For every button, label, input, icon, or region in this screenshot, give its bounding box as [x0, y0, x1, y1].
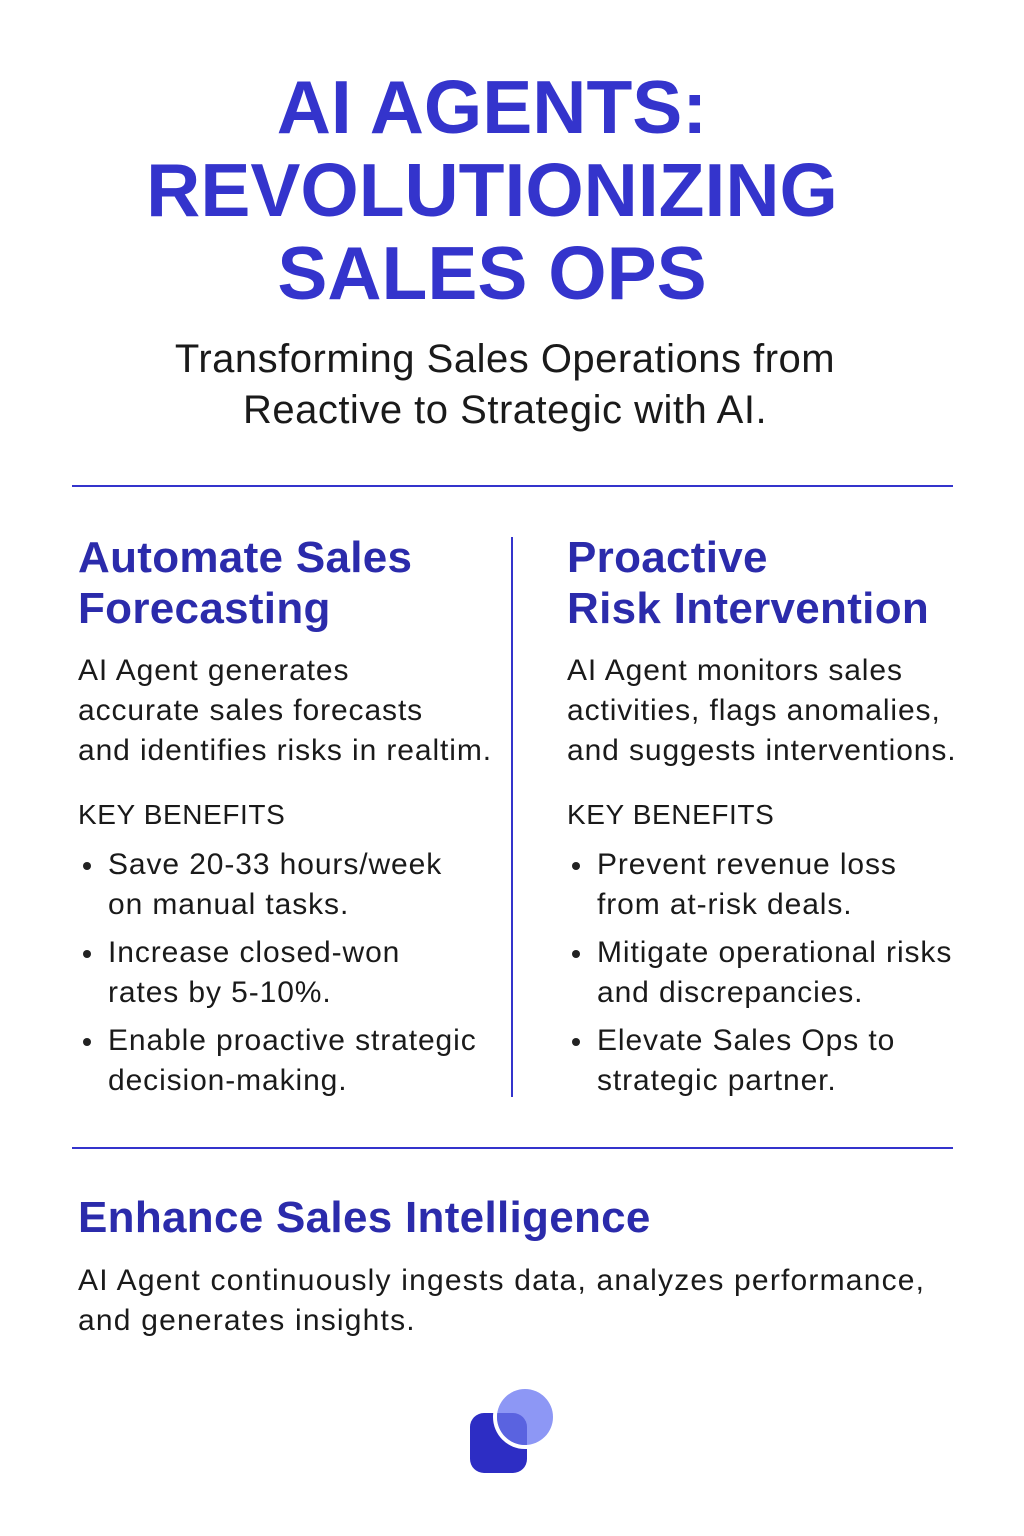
subtitle: Transforming Sales Operations from — [175, 337, 835, 381]
subtitle — [175, 337, 835, 432]
heading: Enhance Sales Intelligence — [78, 1193, 651, 1242]
description — [78, 1264, 925, 1337]
description: and suggests interventions. — [567, 734, 957, 767]
benefits list: and discrepancies. — [597, 976, 863, 1009]
benefits list: Elevate Sales Ops to — [597, 1024, 895, 1057]
benefits list: Prevent revenue loss — [597, 848, 897, 881]
benefits list: Mitigate operational risks — [597, 936, 952, 969]
description — [567, 654, 957, 767]
panel: sales intelligence — [78, 1193, 925, 1337]
description: AI Agent monitors sales — [567, 654, 903, 687]
key benefits label: KEY BENEFITS — [78, 799, 285, 830]
description — [78, 654, 492, 767]
title: SALES OPS — [277, 231, 707, 315]
panel: proactive risk — [567, 533, 957, 1097]
key benefits label: KEY BENEFITS — [567, 799, 774, 830]
description: accurate sales forecasts — [78, 694, 423, 727]
title: REVOLUTIONIZING — [146, 148, 838, 232]
icon: logo — [470, 1389, 553, 1473]
panel: automate forecasting — [78, 533, 492, 1097]
heading: Proactive — [567, 533, 768, 582]
benefits list: Save 20-33 hours/week — [108, 848, 442, 881]
benefits list: rates by 5-10%. — [108, 976, 332, 1009]
heading: Forecasting — [78, 584, 331, 633]
heading — [567, 533, 929, 633]
benefits list — [83, 848, 477, 1097]
benefits list: Enable proactive strategic — [108, 1024, 477, 1057]
description: and generates insights. — [78, 1304, 416, 1337]
benefits list: from at-risk deals. — [597, 888, 852, 921]
description: activities, flags anomalies, — [567, 694, 941, 727]
benefits list: on manual tasks. — [108, 888, 349, 921]
description: AI Agent continuously ingests data, analyzes performance, — [78, 1264, 925, 1297]
subtitle: Reactive to Strategic with AI. — [243, 388, 767, 432]
title: AI AGENTS: — [277, 65, 707, 149]
benefits list: strategic partner. — [597, 1064, 837, 1097]
benefits list: decision-making. — [108, 1064, 348, 1097]
benefits list — [572, 848, 952, 1097]
description: AI Agent generates — [78, 654, 349, 687]
heading: Automate Sales — [78, 533, 412, 582]
heading: Risk Intervention — [567, 584, 929, 633]
heading — [78, 533, 412, 633]
description: and identifies risks in realtim. — [78, 734, 492, 767]
title — [146, 65, 838, 315]
benefits list: Increase closed-won — [108, 936, 400, 969]
